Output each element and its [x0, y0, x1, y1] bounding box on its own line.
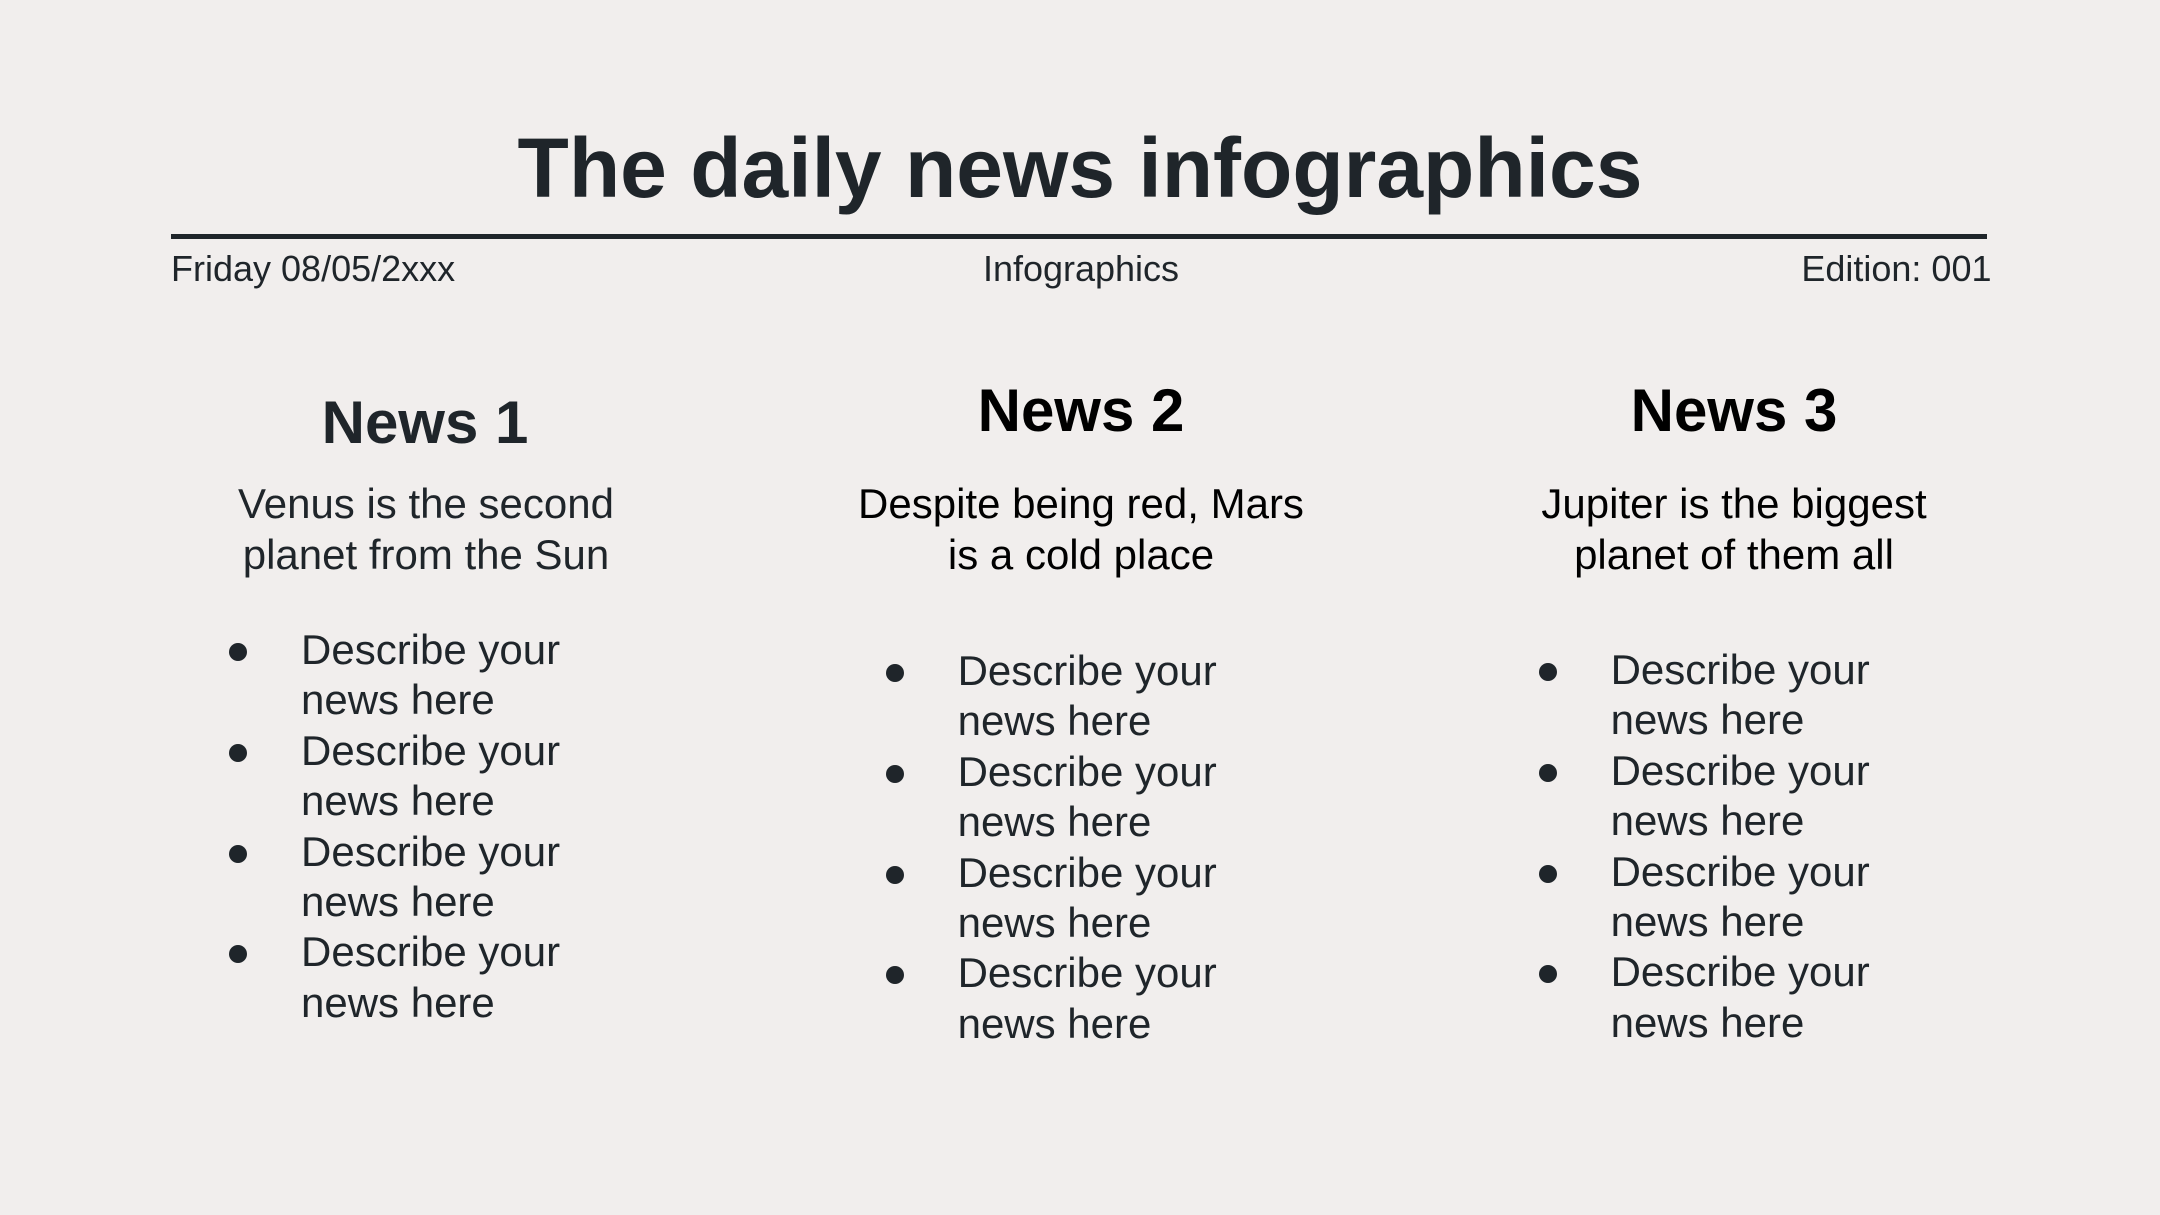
item: Describe your [1611, 646, 1870, 693]
item [301, 626, 560, 723]
bullet [886, 664, 904, 682]
item [958, 949, 1217, 1047]
item: news here [1611, 696, 1804, 743]
text: news 1 summary: planet from the Sun [243, 531, 609, 578]
item: news here [1611, 999, 1804, 1046]
item [301, 727, 560, 824]
item [958, 647, 1217, 744]
list: news 1 items [229, 626, 560, 1026]
text: news 3 summary: planet of them all [1574, 531, 1894, 578]
header rule [171, 234, 1987, 239]
item: news here [301, 878, 495, 925]
item [1611, 848, 1870, 945]
item [301, 828, 560, 925]
bullet [1539, 663, 1557, 681]
item [301, 928, 560, 1026]
bullet [229, 845, 247, 863]
bullet [1539, 865, 1557, 883]
item: Describe your [1611, 747, 1870, 794]
bullet [886, 866, 904, 884]
item: Describe your [958, 647, 1217, 694]
item: Describe your [301, 828, 560, 875]
text: news 3 summary: Jupiter is the biggest [1541, 480, 1927, 527]
list: news 2 items [886, 647, 1217, 1047]
heading: news 3: News 3 [1631, 377, 1837, 444]
text: news 2 summary: is a cold place [948, 531, 1214, 578]
item: news here [958, 899, 1151, 946]
panel: news 3 [1539, 377, 1927, 1046]
item: news here [301, 979, 495, 1026]
item: news here [301, 676, 495, 723]
item: Describe your [301, 727, 560, 774]
item: Describe your [958, 949, 1217, 996]
item: Describe your [301, 626, 560, 673]
bullet [1539, 764, 1557, 782]
list: news 3 items [1539, 646, 1870, 1046]
text: news 3 summary [1541, 480, 1927, 578]
heading: news 2: News 2 [978, 377, 1184, 444]
section label: Infographics [983, 248, 1179, 289]
item: Describe your [301, 928, 560, 975]
panel: news 2 [858, 377, 1304, 1047]
item: Describe your [1611, 848, 1870, 895]
text: news 2 summary [858, 480, 1304, 578]
heading: news 1: News 1 [322, 389, 528, 456]
item: news here [958, 1000, 1151, 1047]
item: Describe your [1611, 948, 1870, 995]
item: Describe your [958, 849, 1217, 896]
item [958, 849, 1217, 946]
item: news here [1611, 797, 1804, 844]
bullet [1539, 965, 1557, 983]
item [1611, 646, 1870, 743]
bullet [229, 643, 247, 661]
text: news 2 summary: Despite being red, Mars [858, 480, 1304, 527]
panel: news 1 [229, 389, 614, 1026]
date: Friday 08/05/2xxx [171, 248, 455, 289]
item: news here [1611, 898, 1804, 945]
edition: Edition: 001 [1801, 248, 1992, 289]
bullet [886, 966, 904, 984]
item: news here [958, 697, 1151, 744]
item [958, 748, 1217, 845]
item: news here [958, 798, 1151, 845]
bullet [886, 765, 904, 783]
item: Describe your [958, 748, 1217, 795]
bullet [229, 945, 247, 963]
title: The daily news infographics [518, 121, 1642, 215]
text: news 1 summary [238, 480, 614, 578]
bullet [229, 744, 247, 762]
item [1611, 747, 1870, 844]
item: news here [301, 777, 495, 824]
text: news 1 summary: Venus is the second [238, 480, 614, 527]
item [1611, 948, 1870, 1046]
